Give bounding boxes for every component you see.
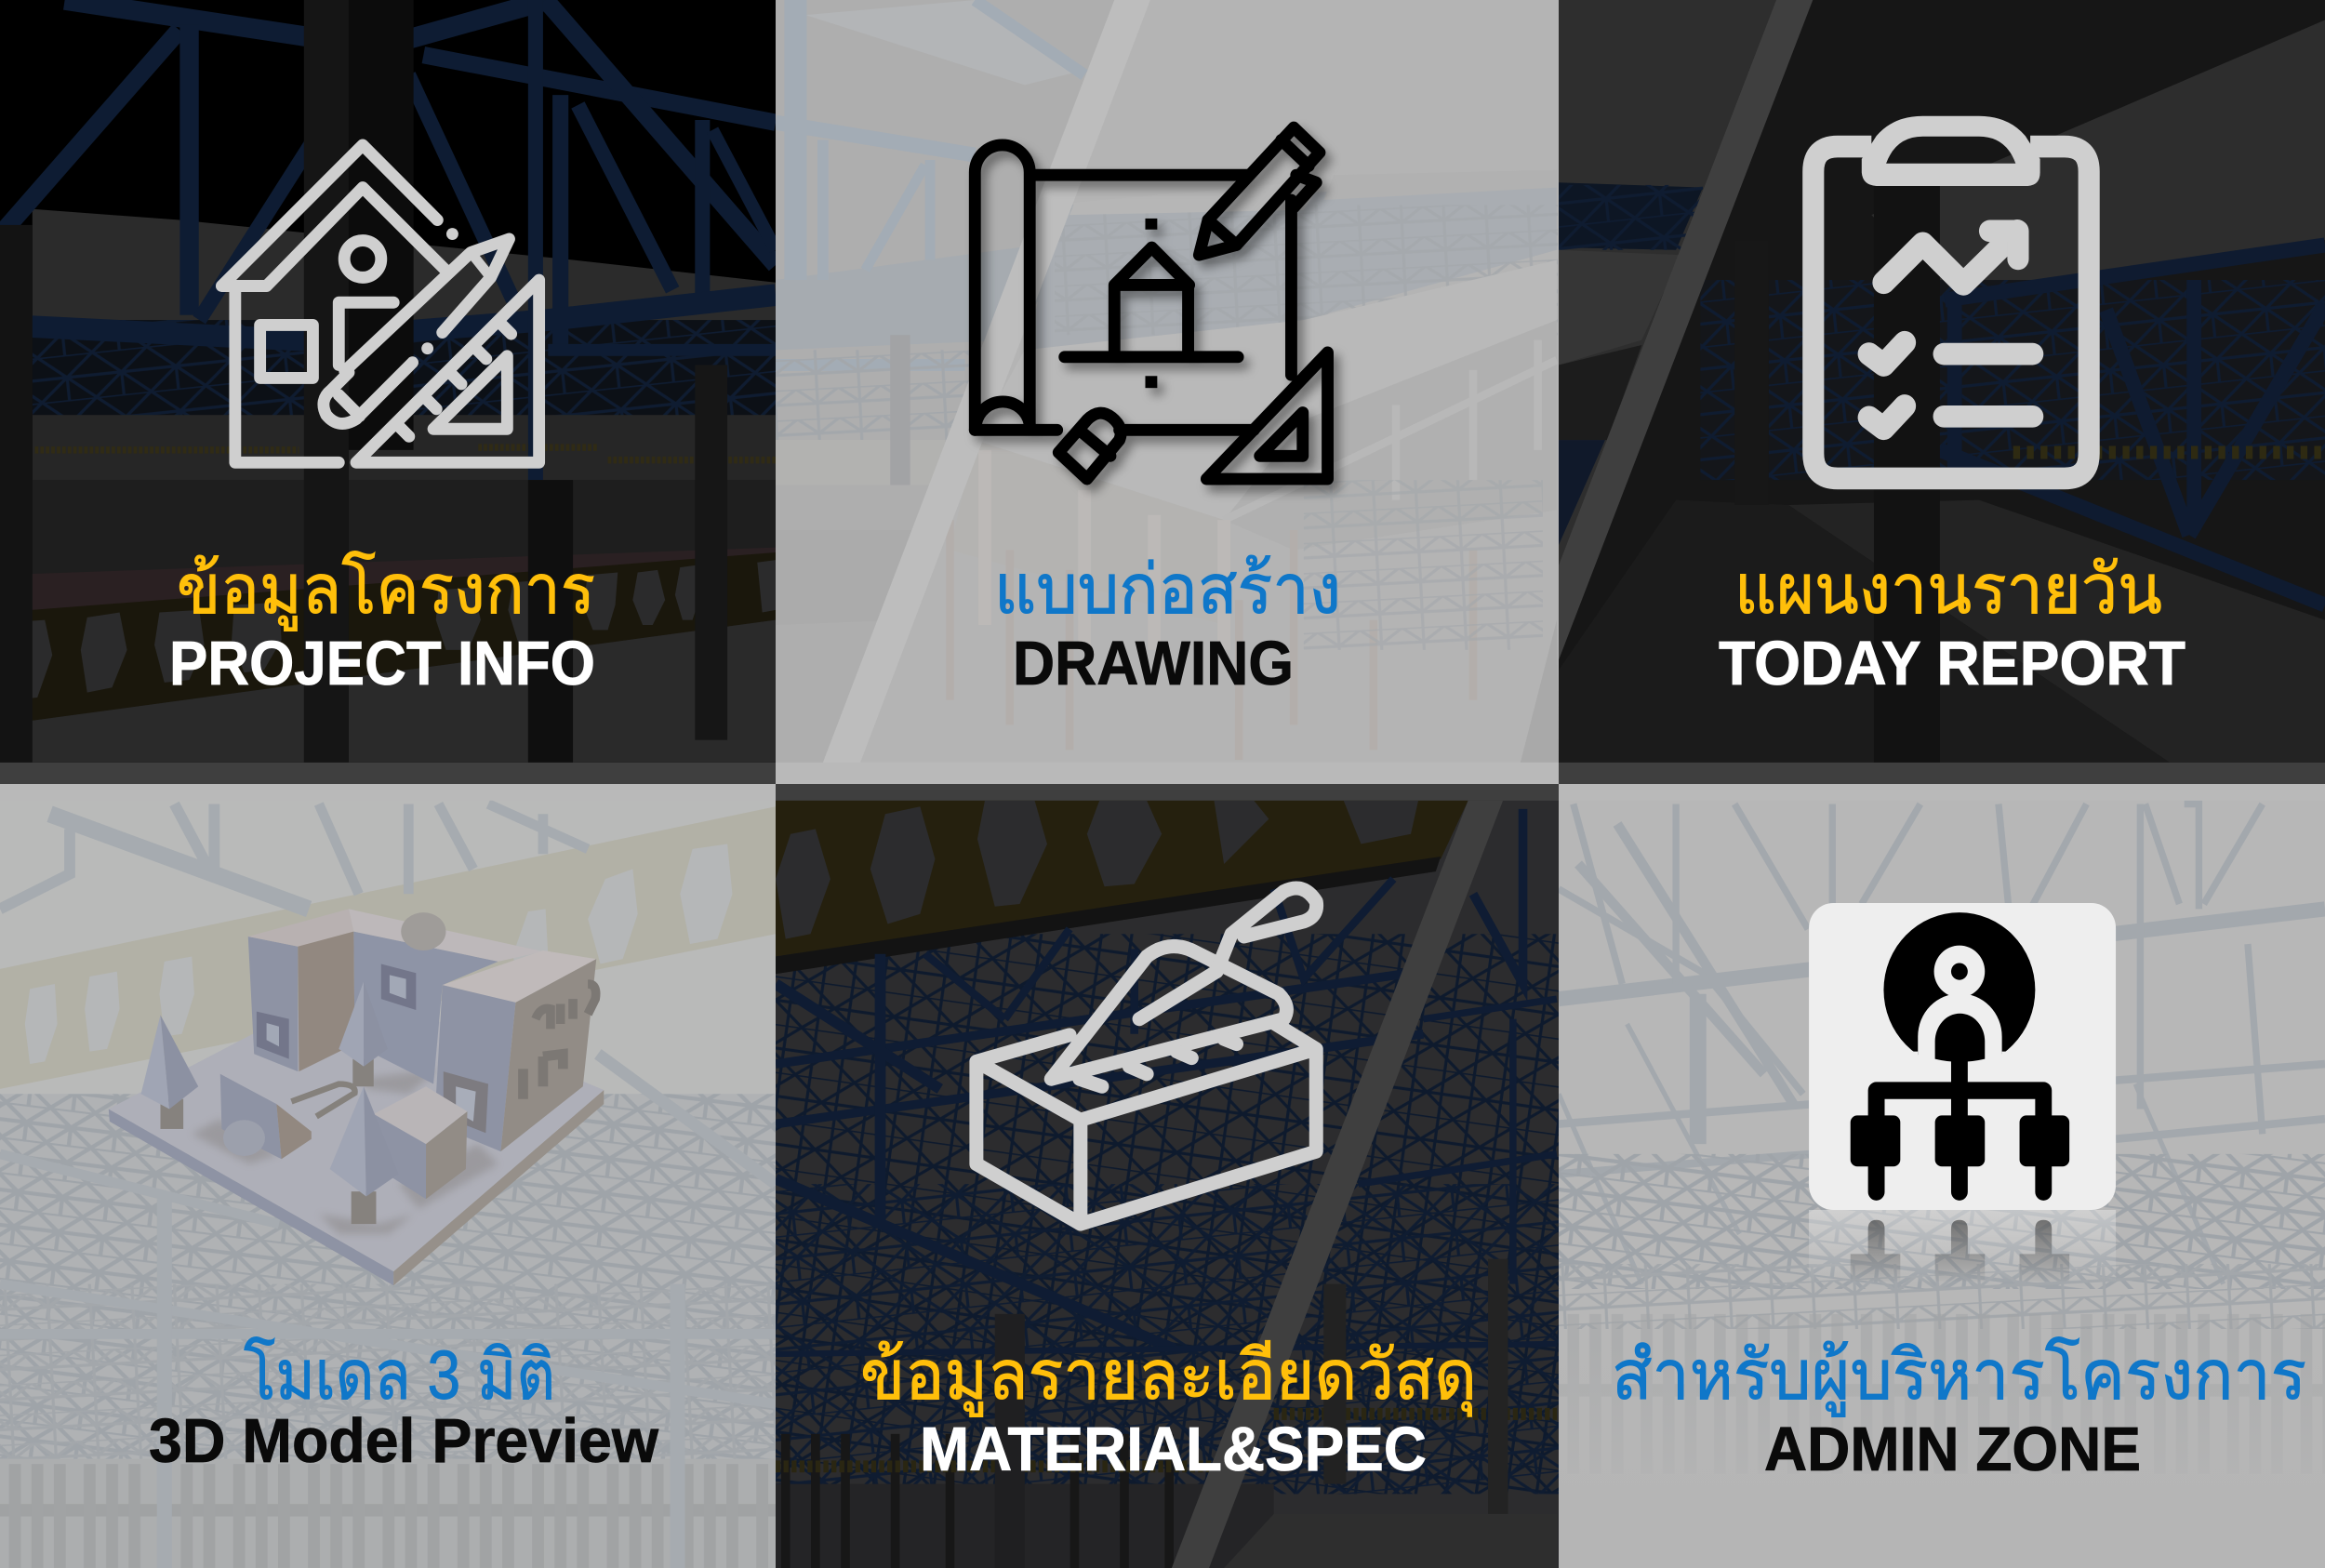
org chart [1851, 1059, 2069, 1192]
panel background: faded steel structure [0, 801, 776, 1568]
tile [1809, 903, 2116, 1210]
panel: project info [0, 0, 776, 763]
panel: admin zone [1559, 801, 2325, 1568]
icon: clipboard with chart and checklist [1814, 116, 2089, 478]
panel background: dark roof trusses with diagonal band [776, 801, 1559, 1568]
title: admin zone thai: สำหรับผู้บริหารโครงการ [1612, 1336, 2306, 1417]
title: material thai: ข้อมูลรายละเอียดวัสดุ [860, 1336, 1477, 1417]
shadows on base plate [192, 1069, 498, 1234]
icon: house plan with pencil and ruler [221, 145, 539, 462]
title: 3d model english: 3D Model Preview [149, 1406, 659, 1476]
title: project info english: PROJECT INFO [169, 629, 595, 698]
panel background: faded roof trusses [1559, 801, 2325, 1568]
icon: brick and trowel [976, 888, 1317, 1224]
base plate [109, 984, 604, 1285]
title: today report english: TODAY REPORT [1719, 629, 2186, 698]
trees [141, 981, 399, 1224]
panel background: dark building interior with diagonal band [1559, 0, 2325, 763]
panel: drawing [776, 0, 1559, 763]
panel: 3d model preview [0, 801, 776, 1568]
icon: organisation chart app tile [1809, 903, 2116, 1284]
title: drawing thai: แบบก่อสร้าง [994, 551, 1341, 628]
panel: today report [1559, 0, 2325, 763]
title: today report thai: แผนงานรายวัน [1734, 551, 2162, 628]
tile reflection [1809, 1210, 2116, 1284]
title: material english: MATERIAL&SPEC [920, 1415, 1427, 1484]
3d model: house block on a base plate with trees [109, 909, 604, 1285]
small blocks and stairs [220, 1074, 467, 1199]
title: drawing english: DRAWING [1013, 629, 1294, 698]
title: admin zone english: ADMIN ZONE [1764, 1415, 2141, 1484]
title: project info thai: ข้อมูลโครงการ [177, 551, 595, 631]
icon: blueprint roll with pencil, eraser and set square [975, 127, 1328, 479]
rocks [223, 912, 445, 1156]
title: 3d model thai: โมเดล 3 มิติ [244, 1336, 555, 1414]
main building [248, 909, 596, 1151]
panel background: faded building with diagonal band [776, 0, 1559, 763]
panel: material and spec [776, 801, 1559, 1568]
user head and body [1883, 912, 2035, 1071]
panel background: dark steel structure [0, 0, 776, 763]
